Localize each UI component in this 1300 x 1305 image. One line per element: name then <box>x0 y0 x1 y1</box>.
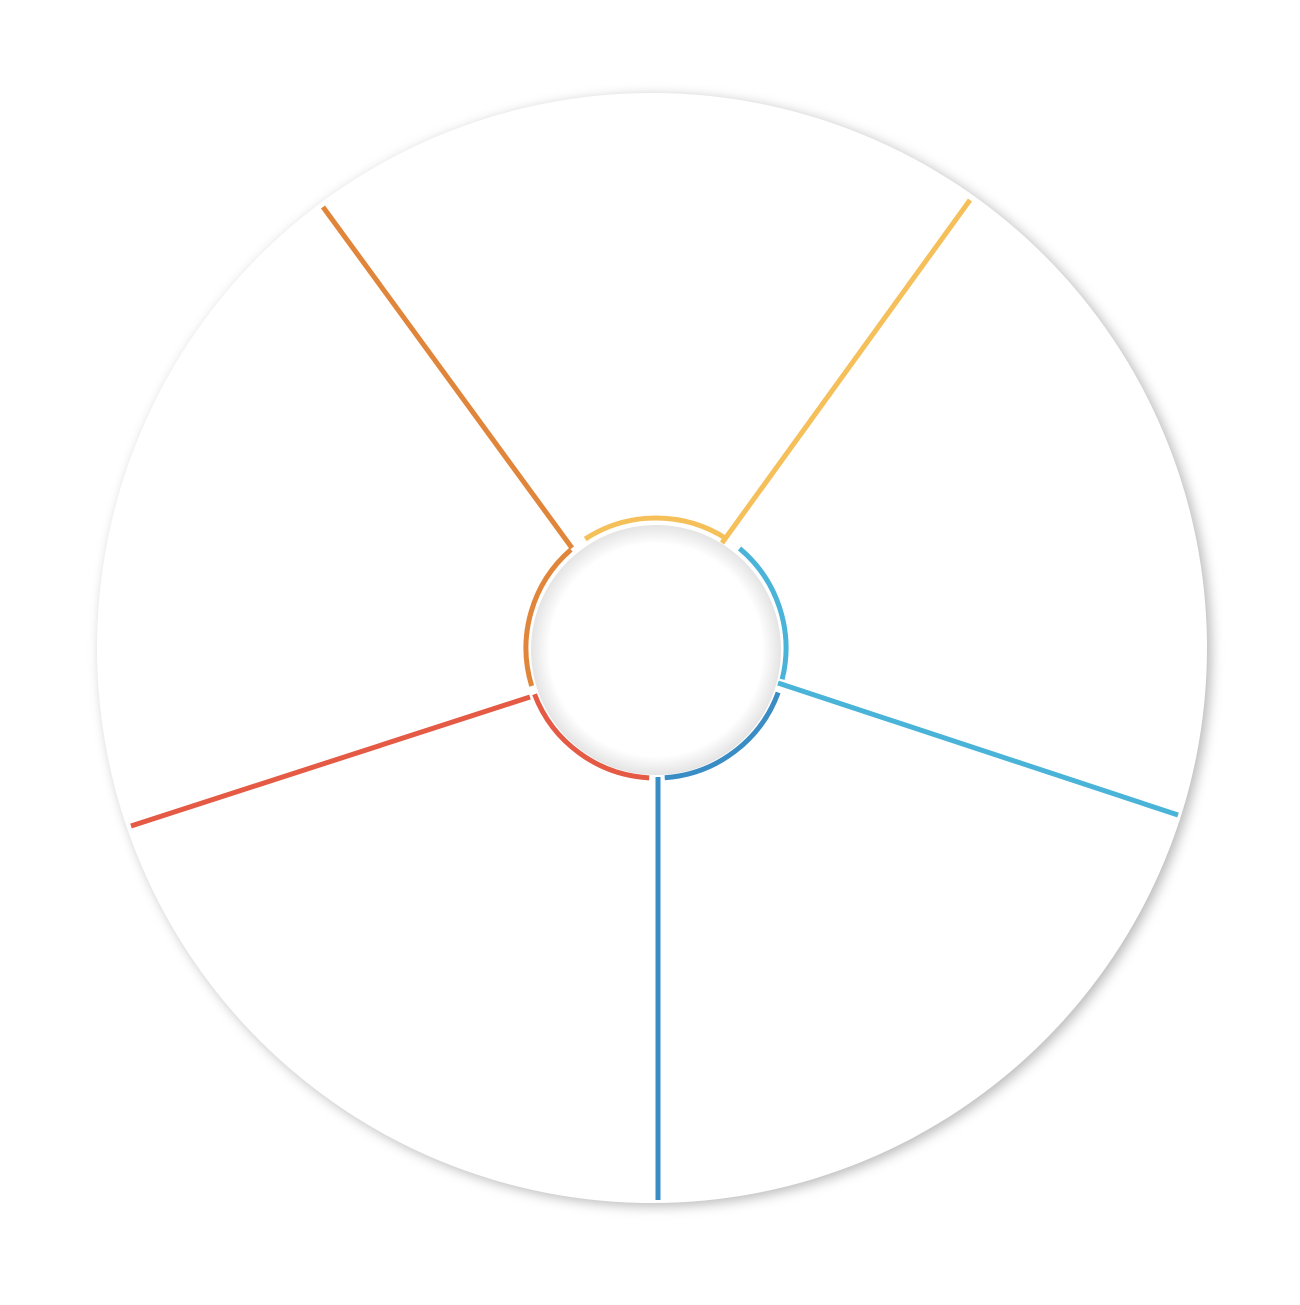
arc ring <box>473 465 839 831</box>
spoke: yellow <box>722 200 970 543</box>
spoke: red <box>131 697 530 826</box>
spoke: dark blue <box>656 777 660 1200</box>
inner circle <box>473 465 839 831</box>
outer circle <box>97 93 1211 1206</box>
spoke: orange <box>323 207 572 548</box>
spoke: light blue <box>778 683 1178 815</box>
